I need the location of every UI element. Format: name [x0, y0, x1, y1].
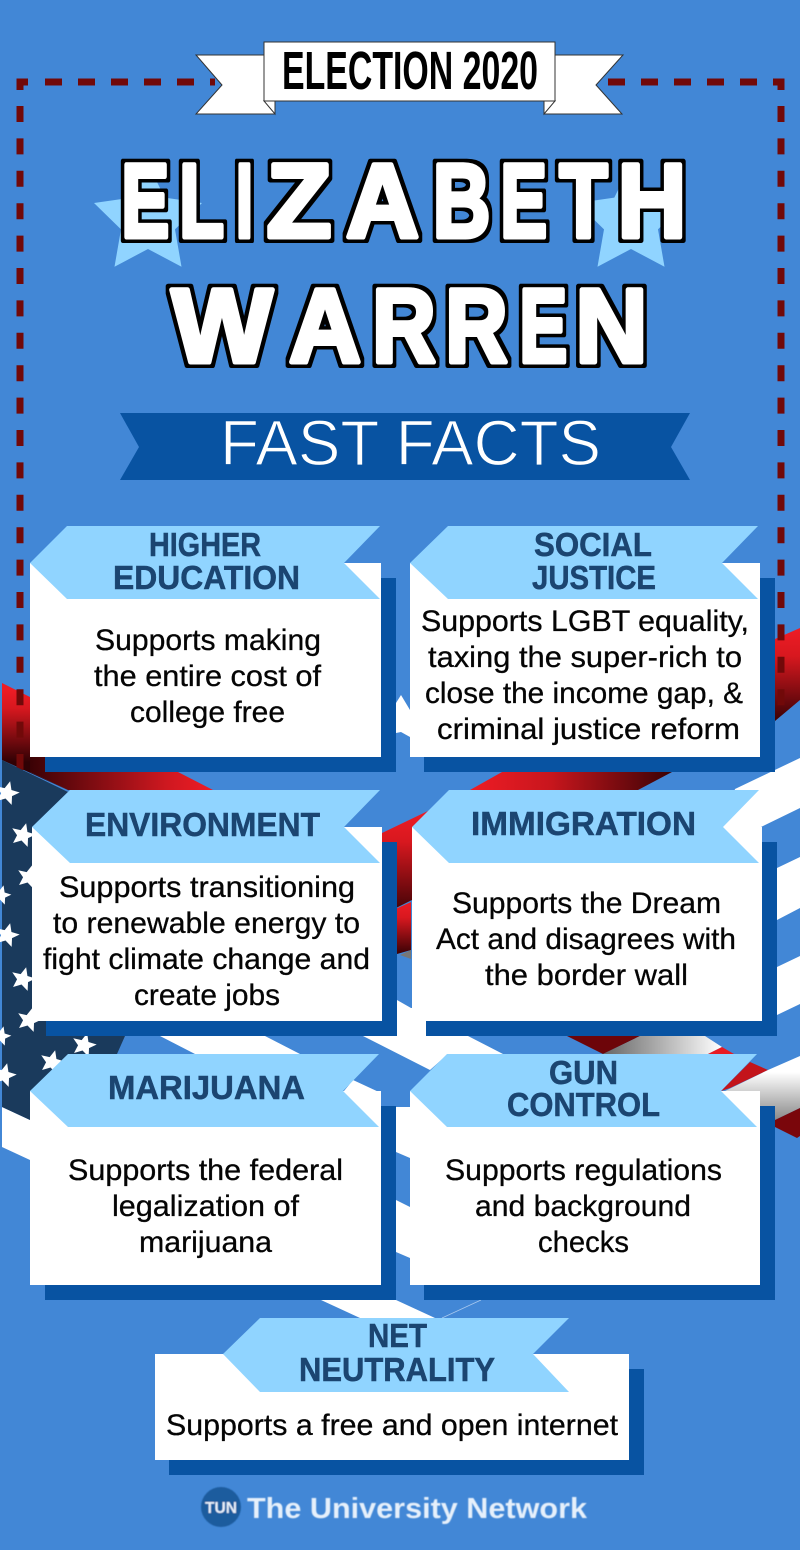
- panel: gun control: GUN: [549, 1054, 618, 1091]
- panel: higher education: Supports making: [95, 624, 321, 657]
- panel: net neutrality: [155, 1317, 644, 1475]
- footer logo: The University Network: [201, 1487, 588, 1527]
- panel: social justice: JUSTICE: [532, 559, 656, 596]
- panel: net neutrality: NET: [368, 1317, 427, 1354]
- panel: social justice: taxing the super-rich to: [428, 641, 742, 674]
- panel: environment: create jobs: [134, 979, 280, 1012]
- panel: marijuana: [30, 1054, 396, 1300]
- panel: gun control: checks: [538, 1226, 629, 1259]
- title: Elizabeth Warren: H: [618, 143, 686, 260]
- panel: marijuana: legalization of: [112, 1190, 300, 1223]
- panel: higher education: [30, 526, 396, 772]
- footer logo: The University Network: The University Network: [247, 1493, 588, 1525]
- panel: environment: fight climate change and: [43, 943, 370, 976]
- footer logo: The University Network: TUN: [205, 1500, 237, 1517]
- panel: immigration: Act and disagrees with: [436, 923, 736, 956]
- title: Elizabeth Warren: Z: [267, 143, 331, 260]
- panel: environment: to renewable energy to: [53, 907, 360, 940]
- panel: higher education: HIGHER: [149, 526, 261, 563]
- title: Elizabeth Warren: I: [236, 143, 253, 260]
- panel: social justice: criminal justice reform: [437, 713, 740, 746]
- panel: higher education: college free: [130, 696, 285, 729]
- banner: election 2020: [196, 41, 623, 114]
- panel: social justice: Supports LGBT equality,: [421, 605, 749, 638]
- dashed border: [20, 82, 781, 772]
- title: Elizabeth Warren: W: [172, 268, 272, 385]
- title: Elizabeth Warren: N: [575, 268, 648, 385]
- panel: social justice: [410, 526, 775, 772]
- panel: gun control: CONTROL: [507, 1086, 660, 1123]
- panel: marijuana: marijuana: [139, 1226, 272, 1259]
- ribbon: fast facts: FAST FACTS: [220, 407, 601, 479]
- panel: immigration: [412, 790, 777, 1036]
- panel: gun control: and background: [475, 1190, 691, 1223]
- panel: higher education: the entire cost of: [94, 660, 322, 693]
- panel: net neutrality: NEUTRALITY: [299, 1351, 495, 1388]
- panel: environment: ENVIRONMENT: [85, 806, 320, 843]
- panel: immigration: IMMIGRATION: [471, 805, 696, 842]
- panel: environment: Supports transitioning: [59, 871, 355, 904]
- title: Elizabeth Warren: [121, 143, 686, 385]
- title: Elizabeth Warren: R: [445, 268, 508, 385]
- panel: gun control: [410, 1054, 775, 1300]
- panel: social justice: SOCIAL: [534, 526, 652, 563]
- panel: gun control: Supports regulations: [445, 1154, 722, 1187]
- title: Elizabeth Warren: A: [289, 268, 361, 385]
- decorative stars: [94, 164, 685, 267]
- ribbon: fast facts: [120, 407, 690, 480]
- title: Elizabeth Warren: T: [559, 143, 608, 260]
- banner: election 2020: ELECTION 2020: [282, 41, 538, 101]
- flag background stripes: [2, 628, 800, 1318]
- panel: immigration: Supports the Dream: [452, 887, 721, 920]
- flag canton with stars: [0, 760, 125, 1120]
- title: Elizabeth Warren: E: [121, 143, 169, 260]
- panel: environment: [32, 790, 397, 1036]
- title: Elizabeth Warren: R: [372, 268, 436, 385]
- title: Elizabeth Warren: E: [519, 268, 567, 385]
- panel: immigration: the border wall: [485, 959, 688, 992]
- panel: higher education: EDUCATION: [113, 559, 300, 596]
- panel: net neutrality: Supports a free and open internet: [166, 1409, 619, 1442]
- title: Elizabeth Warren: L: [179, 143, 224, 260]
- title: Elizabeth Warren: B: [433, 143, 490, 260]
- panel: marijuana: MARIJUANA: [108, 1069, 305, 1106]
- title: Elizabeth Warren: E: [500, 143, 547, 260]
- panel: social justice: close the income gap, &: [425, 677, 743, 710]
- title: Elizabeth Warren: A: [346, 143, 419, 260]
- panel: marijuana: Supports the federal: [68, 1154, 343, 1187]
